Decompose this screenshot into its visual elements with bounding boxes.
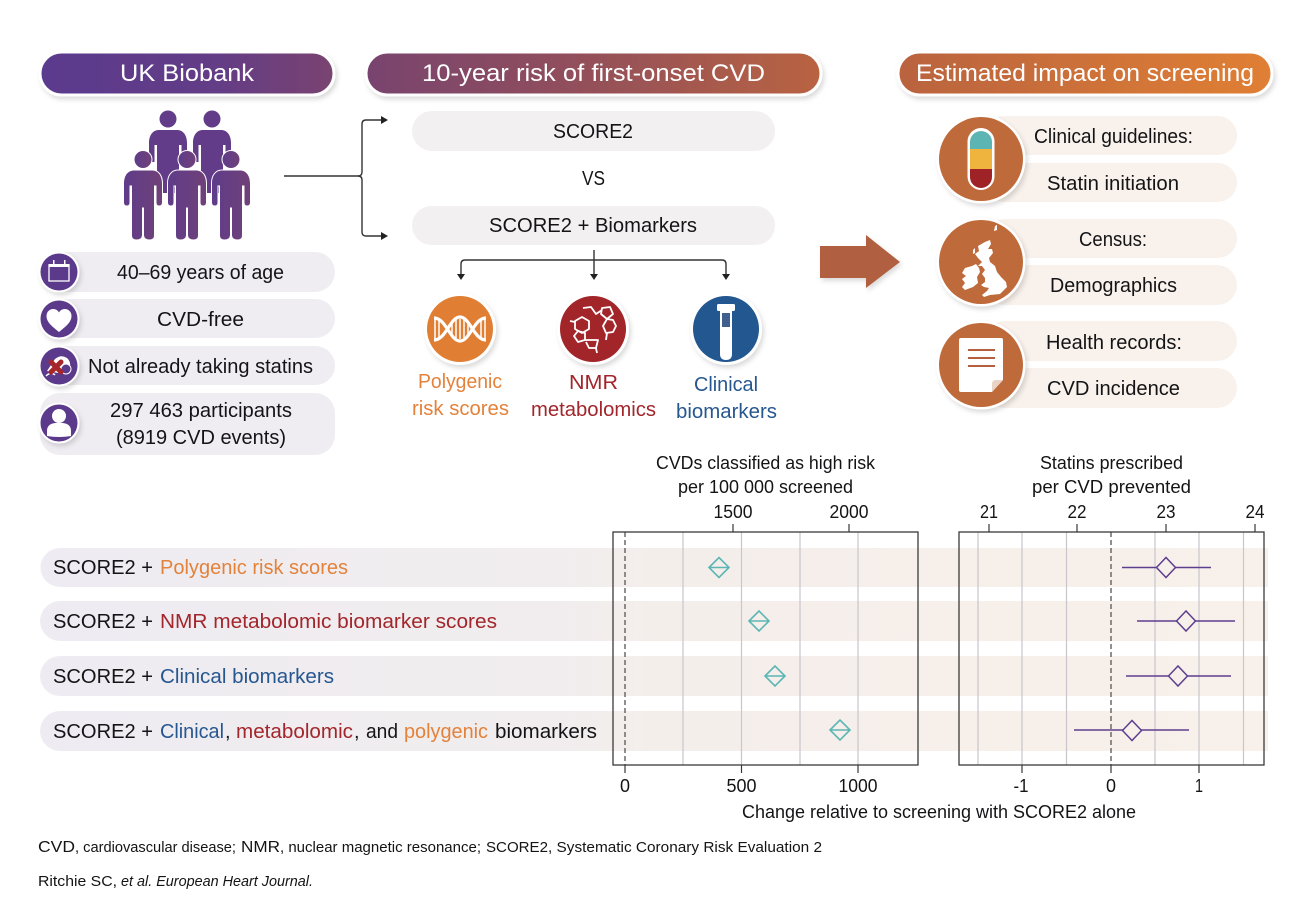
bottom axis labels: 1000 bbox=[838, 776, 878, 796]
footnote: abbreviations: , nuclear magnetic resonance; bbox=[280, 840, 481, 856]
arrow: bracket to SCORE2 comparison bbox=[284, 116, 388, 240]
chart title bbox=[656, 453, 876, 497]
data points with confidence intervals bbox=[1074, 558, 1235, 740]
chart title: CVDs classified as high risk bbox=[656, 453, 876, 473]
panel: health records bbox=[936, 320, 1237, 410]
text: Polygenic risk scores bbox=[412, 371, 509, 420]
icon: molecule NMR bbox=[557, 293, 629, 365]
row label: polygenic risk scores bbox=[53, 557, 348, 579]
icon: calendar bbox=[38, 252, 80, 292]
top axis labels: 21 bbox=[980, 502, 998, 522]
icon: test tube clinical bbox=[690, 293, 762, 365]
panel: age criterion bbox=[38, 252, 335, 292]
chart title: Statins prescribed bbox=[1040, 453, 1183, 473]
panel: census: Census: bbox=[1079, 229, 1147, 251]
panel: age criterion: 40–69 years of age bbox=[117, 262, 284, 284]
footnote: abbreviations: SCORE2 bbox=[486, 840, 548, 856]
header: Estimated impact on screening bbox=[898, 52, 1272, 95]
chart: statins prescribed per CVD prevented bbox=[959, 453, 1264, 796]
footnote: citation bbox=[38, 874, 313, 890]
panel: clinical guidelines bbox=[936, 114, 1237, 204]
top axis labels bbox=[714, 502, 868, 522]
chart title: per CVD prevented bbox=[1032, 477, 1191, 497]
header: Estimated impact on screening: Estimated impact on screening bbox=[916, 60, 1254, 87]
panel: health records: CVD incidence bbox=[1047, 378, 1180, 400]
axis title: change relative to screening: Change relative to screening with SCORE2 alone bbox=[742, 802, 1136, 822]
row label: clinical biomarkers: SCORE2 + bbox=[53, 666, 153, 688]
top axis labels: 1500 bbox=[714, 502, 752, 522]
panel: SCORE2 + Biomarkers: SCORE2 + Biomarkers bbox=[489, 215, 697, 237]
text: Polygenic risk scores: Polygenic bbox=[418, 371, 502, 393]
bottom axis labels: 1 bbox=[1195, 776, 1203, 796]
top axis labels bbox=[980, 502, 1264, 522]
row label: polygenic risk scores: SCORE2 + bbox=[53, 557, 153, 579]
panel: clinical guidelines: Clinical guidelines: bbox=[1034, 126, 1193, 148]
text: Clinical biomarkers: biomarkers bbox=[676, 401, 777, 423]
row label: combined biomarkers: , bbox=[225, 721, 231, 743]
panel: health records: Health records: bbox=[1046, 332, 1182, 354]
text: NMR metabolomics: NMR bbox=[569, 372, 618, 394]
panel: census bbox=[936, 218, 1237, 306]
panel: CVD-free criterion: CVD-free bbox=[157, 309, 244, 331]
footnote: abbreviations: NMR bbox=[241, 839, 280, 856]
text: Polygenic risk scores: risk scores bbox=[412, 398, 509, 420]
panel: statins criterion bbox=[38, 346, 335, 386]
row label: combined biomarkers: and bbox=[366, 721, 398, 743]
footnote: abbreviations: , Systematic Coronary Risk Evaluation 2 bbox=[548, 840, 822, 856]
panel: SCORE2 bbox=[412, 111, 775, 151]
footnote: citation: Ritchie SC, bbox=[38, 874, 117, 890]
footnote: abbreviations: , cardiovascular disease; bbox=[75, 840, 236, 856]
row label: combined biomarkers: Clinical bbox=[160, 721, 224, 743]
panel: participants: 297 463 participants bbox=[110, 400, 292, 422]
chart: CVDs classified as high risk bbox=[613, 453, 918, 796]
text: Clinical biomarkers: Clinical bbox=[694, 374, 758, 396]
footnote: abbreviations bbox=[38, 839, 822, 856]
icon: capsule bbox=[936, 114, 1026, 204]
icon: UK map bbox=[936, 218, 1026, 306]
row label: clinical biomarkers: Clinical biomarkers bbox=[160, 666, 334, 688]
bottom axis labels: 0 bbox=[620, 776, 630, 796]
bottom axis labels: 500 bbox=[726, 776, 756, 796]
row label: NMR metabolomic biomarker scores: NMR metabolomic biomarker scores bbox=[160, 611, 497, 633]
header: 10-year risk of first-onset CVD: 10-year risk of first-onset CVD bbox=[422, 60, 765, 87]
row label: combined biomarkers: polygenic bbox=[404, 721, 488, 743]
icon: document bbox=[936, 320, 1026, 410]
panel: SCORE2: SCORE2 bbox=[553, 121, 633, 143]
panel: census: Demographics bbox=[1050, 275, 1177, 297]
text: VS: VS bbox=[582, 168, 605, 190]
text: NMR metabolomics bbox=[531, 372, 656, 421]
row label: clinical biomarkers bbox=[53, 666, 334, 688]
row label: combined biomarkers: biomarkers bbox=[495, 721, 597, 743]
panel: participants bbox=[38, 393, 335, 455]
data points bbox=[709, 558, 850, 740]
icon: heart bbox=[38, 298, 80, 340]
arrow: split into three biomarker types bbox=[457, 250, 730, 280]
text: Clinical biomarkers bbox=[676, 374, 777, 423]
top axis labels: 2000 bbox=[830, 502, 868, 522]
text: NMR metabolomics: metabolomics bbox=[531, 399, 656, 421]
icon: DNA polygenic bbox=[424, 293, 496, 365]
bottom axis labels bbox=[620, 776, 878, 796]
header: UK Biobank bbox=[40, 52, 334, 95]
footnote: citation: et al. European Heart Journal. bbox=[121, 874, 313, 890]
row label: combined biomarkers: metabolomic bbox=[236, 721, 353, 743]
panel: participants: (8919 CVD events) bbox=[116, 427, 286, 449]
row label: combined biomarkers bbox=[53, 721, 597, 743]
panel: statins criterion: Not already taking statins bbox=[88, 356, 313, 378]
bottom axis labels: -1 bbox=[1014, 776, 1028, 796]
panel: CVD-free criterion bbox=[38, 298, 335, 340]
row label: polygenic risk scores: Polygenic risk scores bbox=[160, 557, 348, 579]
top axis labels: 22 bbox=[1068, 502, 1086, 522]
header: 10-year risk of first-onset CVD bbox=[366, 52, 821, 95]
chart title bbox=[1032, 453, 1191, 497]
bottom axis labels bbox=[1014, 776, 1203, 796]
panel: clinical guidelines: Statin initiation bbox=[1047, 173, 1179, 195]
icon: person bbox=[38, 402, 80, 444]
row label: combined biomarkers: , bbox=[354, 721, 360, 743]
chart title: per 100 000 screened bbox=[678, 477, 853, 497]
bottom axis labels: 0 bbox=[1106, 776, 1116, 796]
row label: NMR metabolomic biomarker scores: SCORE2 + bbox=[53, 611, 153, 633]
arrow: to estimated impact bbox=[820, 235, 900, 288]
panel: row backgrounds bbox=[40, 548, 1268, 751]
footnote: abbreviations: CVD bbox=[38, 839, 75, 856]
header: UK Biobank: UK Biobank bbox=[120, 60, 255, 87]
top axis labels: 23 bbox=[1156, 502, 1176, 522]
icon: group of people bbox=[124, 110, 250, 240]
row label: combined biomarkers: SCORE2 + bbox=[53, 721, 153, 743]
top axis labels: 24 bbox=[1246, 502, 1264, 522]
icon: crossed-out pills bbox=[38, 346, 80, 386]
panel: SCORE2 + Biomarkers bbox=[412, 206, 775, 245]
